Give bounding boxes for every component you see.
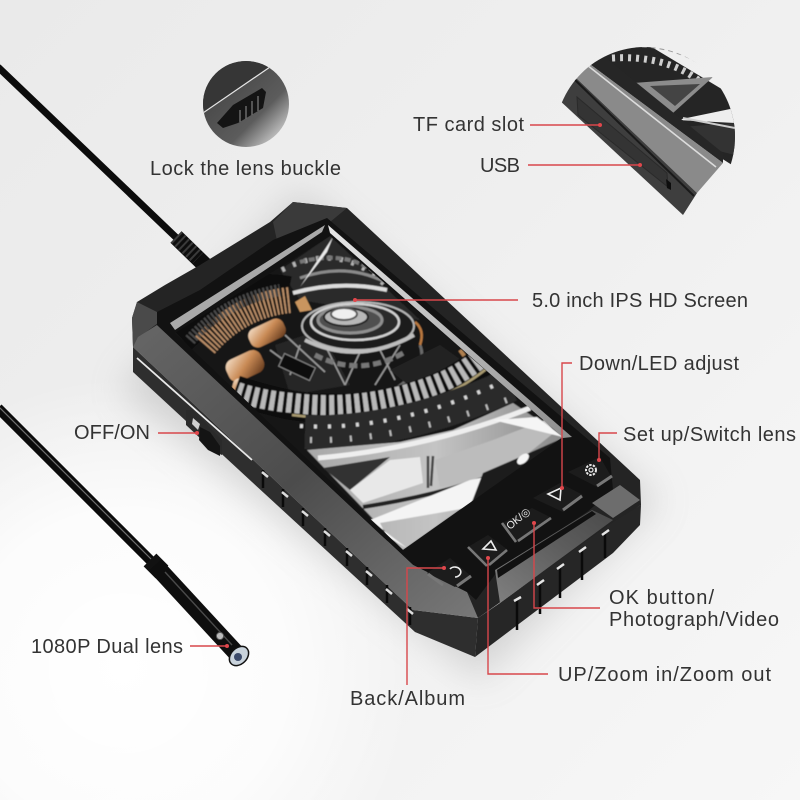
outer frame [132, 202, 641, 618]
right machinery [397, 344, 424, 386]
button: OK: OK/◎ [504, 506, 533, 532]
screen image [185, 236, 563, 550]
button: OK [502, 506, 552, 543]
callout lines [158, 125, 640, 685]
label: OK line 2: Photograph/Video [609, 609, 779, 631]
callout dots [195, 123, 642, 648]
white blade [300, 237, 333, 287]
top mechanical area [280, 236, 420, 320]
lens probe cable [0, 406, 252, 669]
button: back [427, 558, 472, 587]
lens tip [216, 632, 252, 669]
inset: ports close-up [557, 40, 740, 215]
label: screen: 5.0 inch IPS HD Screen [532, 290, 748, 312]
front left strip [133, 325, 478, 618]
label: setup: Set up/Switch lens [623, 424, 796, 446]
bottom right side wall [475, 505, 641, 657]
concentric rings [302, 302, 414, 366]
top corner chamfer [273, 202, 347, 255]
right lower panel [495, 510, 613, 603]
label: TF card: TF card slot [413, 114, 524, 136]
lower dots band [305, 385, 510, 432]
power switch [186, 410, 222, 456]
buttons [427, 457, 612, 587]
button: settings [568, 457, 612, 487]
label: OK line 1: OK button/ [609, 587, 714, 609]
right chamfer [592, 485, 640, 518]
side highlight [137, 358, 252, 460]
label: back: Back/Album [350, 688, 465, 710]
left side wall [133, 347, 478, 657]
machinery [276, 336, 350, 393]
label: up: UP/Zoom in/Zoom out [558, 664, 771, 686]
label: lock: Lock the lens buckle [150, 158, 341, 180]
label: dual lens: 1080P Dual lens [31, 636, 183, 658]
gear teeth [235, 355, 490, 409]
copper blocks [247, 318, 287, 348]
inset: lens buckle [203, 61, 289, 147]
side ribs [262, 470, 609, 630]
bright metal lower area [307, 403, 563, 550]
screen reflection strips [170, 225, 572, 438]
left corner chamfer [132, 302, 158, 347]
device shadow [120, 190, 660, 680]
bezel [157, 218, 613, 600]
top cable [0, 67, 212, 272]
copper chevrons [178, 294, 288, 335]
label: USB: USB [480, 155, 520, 177]
button: up [468, 535, 508, 567]
button: down [533, 483, 583, 512]
device body [132, 202, 641, 657]
label: power: OFF/ON [74, 422, 150, 444]
label: down: Down/LED adjust [579, 353, 739, 375]
